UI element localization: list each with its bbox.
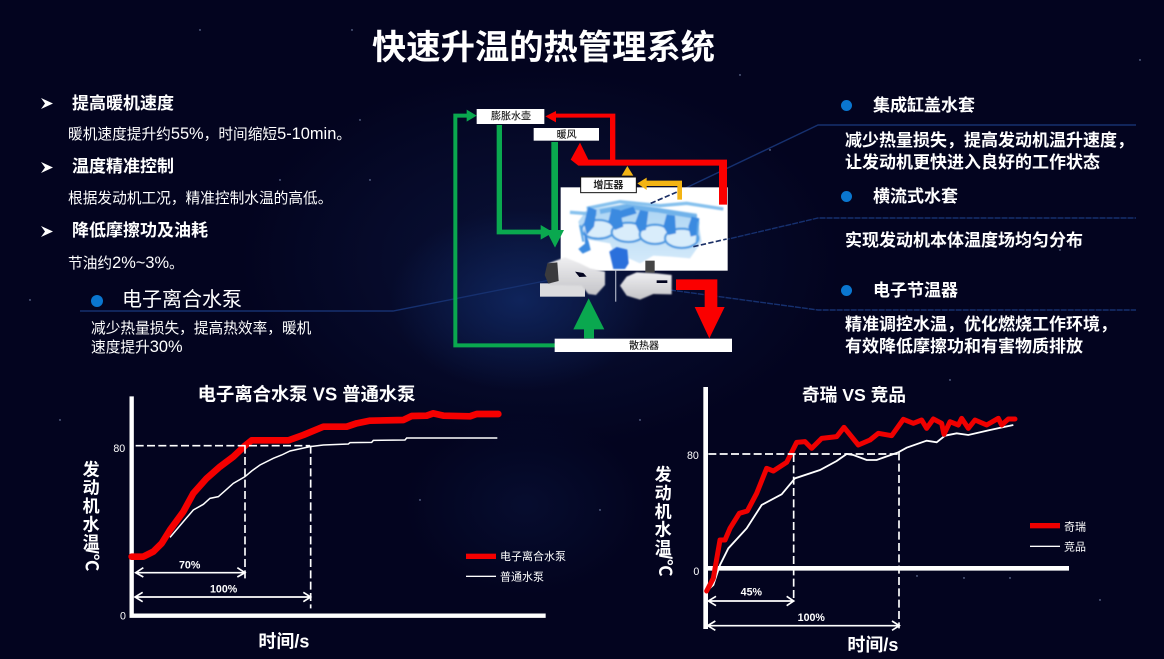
bullet icon (841, 191, 852, 202)
label: turbocharger (581, 177, 636, 193)
callout heading: 电子离合水泵 (122, 289, 242, 311)
value labels (687, 450, 825, 624)
legend: 普通水泵 (500, 569, 544, 583)
legend: 竞品 (1064, 539, 1086, 553)
benefit heading: warm-up speed: 提高暖机速度 (72, 94, 174, 113)
reference dashed lines (708, 452, 899, 628)
benefit text: friction and fuel: 节油约2%~3%。 (68, 254, 184, 272)
left benefits text block (41, 94, 351, 272)
dimension arrows (708, 596, 899, 630)
value labels: 0 (120, 611, 126, 623)
chart: Chery vs competitor (655, 384, 1086, 655)
divider stem (614, 271, 618, 302)
callout: electronic thermostat (841, 281, 1117, 356)
callout: cross-flow water jacket (841, 187, 1083, 250)
callout heading: 电子节温器 (873, 281, 958, 300)
thermal system flow diagram (453, 109, 732, 352)
benefit heading: friction and fuel: 降低摩擦功及油耗 (72, 221, 208, 240)
y axis label: 机 (83, 497, 100, 516)
y axis unit: /℃ (655, 554, 675, 576)
callout text (845, 315, 1117, 356)
callout: electronic clutch water pump (91, 289, 311, 356)
water pump image (540, 257, 605, 297)
value labels: 100% (210, 584, 238, 596)
electronic pump curve (132, 413, 498, 557)
x axis label: 时间/s (847, 635, 898, 655)
callout text: 精准调控水温，优化燃烧工作环境， (845, 315, 1117, 334)
green coolant loop arrows (453, 110, 604, 347)
water jacket (570, 202, 723, 263)
chart title: 电子离合水泵 VS 普通水泵 (198, 383, 416, 404)
callout: cylinder head water jacket (841, 96, 1134, 172)
benefit text: warm-up speed: 暖机速度提升约55%，时间缩短5-10min。 (68, 125, 351, 143)
callout text: 减少热量损失，提高发动机温升速度， (845, 131, 1134, 150)
y axis label: 水 (655, 521, 672, 540)
legend (1030, 519, 1086, 553)
engine image panel (561, 187, 728, 271)
x axis label: 时间/s (258, 632, 309, 652)
blue actuator (609, 247, 629, 269)
axes (706, 387, 1069, 629)
dimension arrows (135, 568, 311, 602)
label: turbocharger: 增压器 (593, 178, 623, 191)
callout text: 减少热量损失，提高热效率，暖机 (91, 321, 311, 337)
callout text: 速度提升30% (91, 338, 183, 356)
value labels (113, 443, 238, 623)
label: heater (534, 128, 599, 141)
value labels: 100% (798, 612, 825, 624)
chart title: 奇瑞 VS 竞品 (802, 384, 906, 405)
y axis label: 水 (83, 515, 100, 534)
y axis unit: /℃ (82, 549, 102, 571)
y axis label: 温 (83, 534, 100, 553)
callout heading: 集成缸盖水套 (873, 96, 975, 115)
callout text (845, 131, 1134, 172)
y axis label: 温 (655, 539, 672, 558)
Chery curve (707, 418, 1015, 591)
benefit text: temperature control: 根据发动机工况，精准控制水温的高低。 (68, 191, 332, 207)
callout heading: 横流式水套 (873, 187, 958, 206)
bullet icon (841, 100, 852, 111)
value labels: 0 (693, 566, 699, 578)
red coolant arrows (545, 111, 727, 338)
y axis label: 动 (655, 484, 672, 503)
callout text (91, 320, 311, 356)
y axis label: 机 (655, 502, 672, 521)
reference dashed lines (136, 446, 311, 608)
legend (466, 549, 566, 583)
legend: 奇瑞 (1064, 519, 1086, 533)
value labels: 70% (179, 560, 201, 572)
competitor curve (706, 425, 1013, 592)
orange turbo arrows (622, 166, 682, 200)
arrow bullet 3 (41, 226, 53, 237)
y axis label: 发 (83, 459, 100, 479)
value labels: 45% (741, 587, 763, 599)
bullet icon (91, 295, 103, 307)
value labels: 80 (113, 443, 125, 455)
callout text: 有效降低摩擦功和有害物质排放 (845, 337, 1083, 356)
label: radiator: 散热器 (629, 339, 659, 352)
arrow bullet 2 (41, 162, 53, 173)
title: 快速升温的热管理系统 (372, 29, 715, 67)
arrow bullet 1 (41, 98, 53, 109)
axes (132, 396, 546, 616)
regular pump curve (170, 438, 497, 537)
y axis label: 动 (83, 479, 100, 498)
label: radiator (555, 339, 732, 352)
label: expansion tank: 膨胀水壶 (491, 110, 531, 123)
y axis label: 发 (655, 465, 672, 485)
label: heater: 暖风 (557, 128, 577, 141)
callout text: 实现发动机本体温度场均匀分布 (845, 231, 1083, 250)
legend: 电子离合水泵 (500, 549, 566, 563)
thermostat image (620, 261, 672, 300)
benefit heading: temperature control: 温度精准控制 (72, 157, 174, 176)
value labels: 80 (687, 450, 699, 462)
label: expansion tank (477, 109, 544, 124)
callout text: 让发动机更快进入良好的工作状态 (845, 153, 1100, 172)
chart: electronic clutch pump vs regular pump (82, 383, 566, 652)
bullet icon (841, 285, 852, 296)
